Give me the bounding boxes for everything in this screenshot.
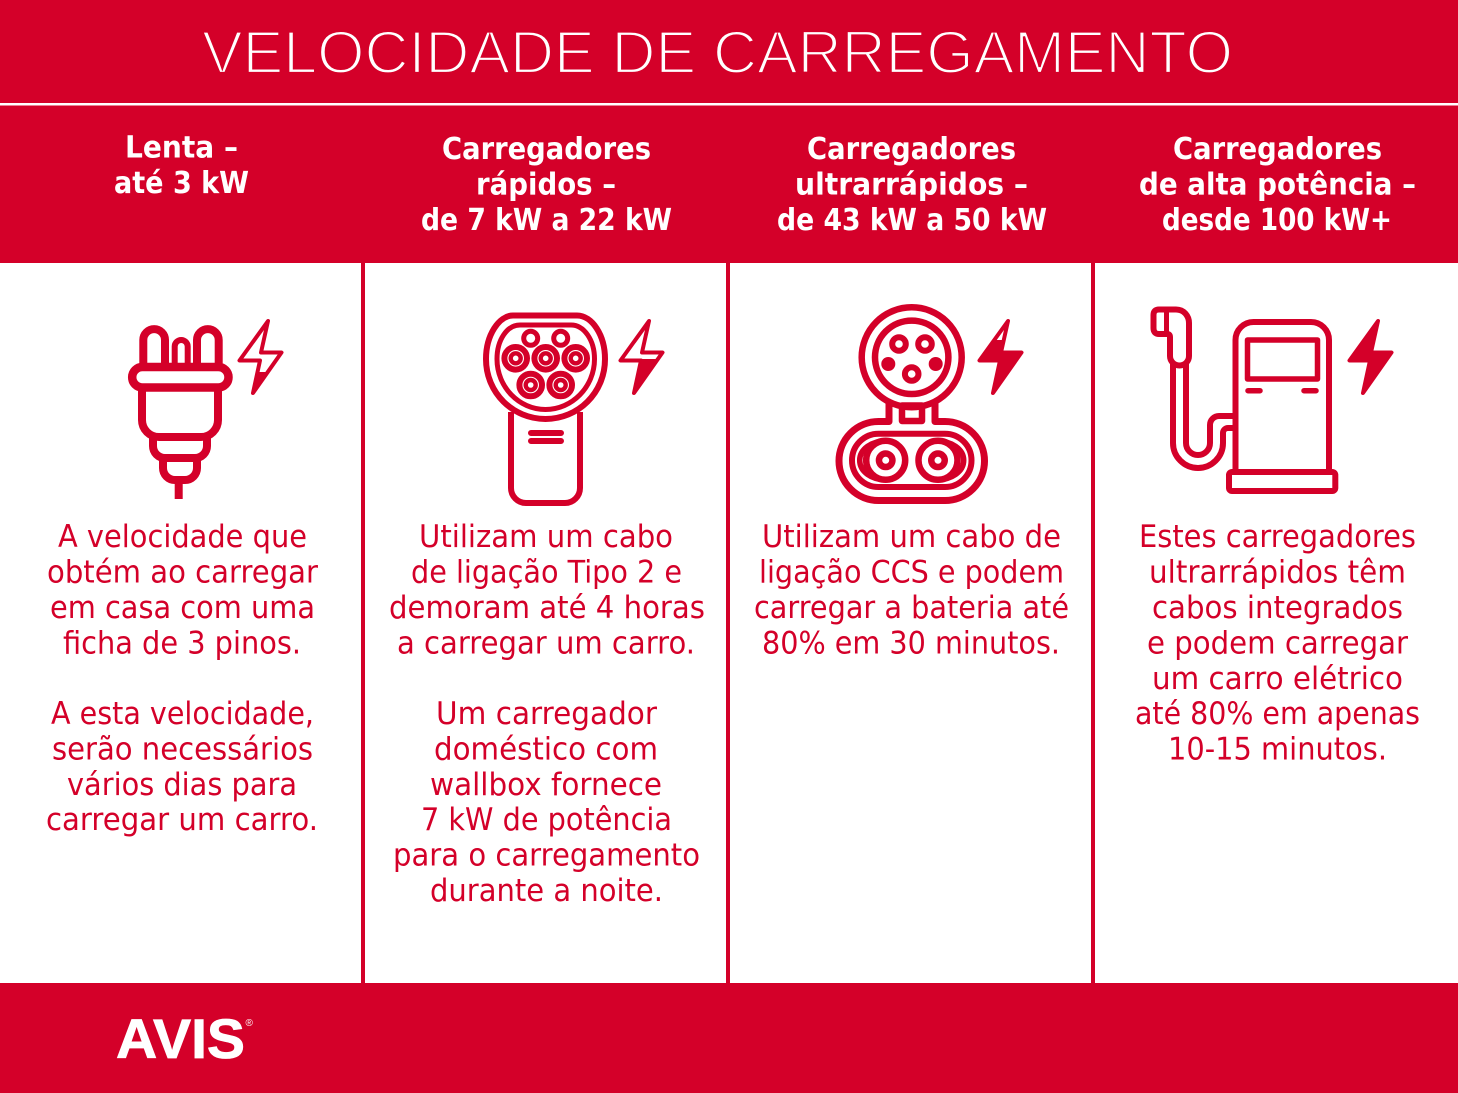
column 3 heading: Carregadores bbox=[807, 132, 1016, 167]
column 1 text: A esta velocidade, bbox=[51, 696, 314, 732]
column 2 text: a carregar um carro. bbox=[397, 625, 695, 661]
column 4 heading bbox=[1139, 132, 1416, 238]
column 2 text: demoram até 4 horas bbox=[389, 590, 705, 626]
title: VELOCIDADE DE CARREGAMENTO bbox=[202, 19, 1233, 86]
column 4 text: um carro elétrico bbox=[1152, 661, 1403, 697]
column 4 heading: Carregadores bbox=[1173, 132, 1382, 167]
column 2 text: wallbox fornece bbox=[430, 767, 662, 803]
column 2 heading: rápidos – bbox=[476, 168, 616, 202]
logo: AVIS: ® bbox=[246, 1018, 254, 1029]
column 3 text: Utilizam um cabo de bbox=[762, 519, 1061, 555]
column 3 heading bbox=[777, 132, 1047, 238]
icon: type 2 connector with half-filled bolt bbox=[486, 316, 662, 503]
icon: plug with outlined bolt bbox=[132, 321, 282, 499]
column 4 heading: de alta potência – bbox=[1139, 168, 1416, 202]
header band bbox=[0, 0, 1458, 263]
column 3 heading: de 43 kW a 50 kW bbox=[777, 203, 1047, 238]
column 4 text: até 80% em apenas bbox=[1135, 696, 1420, 732]
column 2 text: de ligação Tipo 2 e bbox=[411, 555, 682, 591]
column 1 heading bbox=[114, 130, 249, 201]
column 4 text bbox=[1135, 519, 1420, 767]
column 3 text: ligação CCS e podem bbox=[759, 555, 1064, 591]
column 1 text: ficha de 3 pinos. bbox=[63, 625, 301, 661]
column 1 text: vários dias para bbox=[67, 767, 297, 803]
column 2 text: Um carregador bbox=[436, 696, 657, 732]
column 2 text: doméstico com bbox=[434, 731, 658, 767]
column 2 text bbox=[389, 519, 705, 909]
icon: charging station with filled bolt bbox=[1154, 309, 1392, 491]
column 3 heading: ultrarrápidos – bbox=[795, 168, 1028, 202]
column 2 text: durante a noite. bbox=[430, 873, 663, 909]
icon: CCS connector with mostly filled bolt bbox=[839, 307, 1022, 500]
column 2 text: 7 kW de potência bbox=[421, 802, 672, 838]
column 1 text: carregar um carro. bbox=[46, 802, 318, 838]
column 4 text: Estes carregadores bbox=[1139, 519, 1416, 555]
column 4 text: e podem carregar bbox=[1147, 625, 1408, 661]
column 1 text: obtém ao carregar bbox=[47, 555, 318, 591]
column 4 text: ultrarrápidos têm bbox=[1149, 555, 1406, 591]
footer band bbox=[0, 983, 1458, 1093]
column 1 text: serão necessários bbox=[52, 731, 313, 767]
column 1 text bbox=[46, 519, 318, 838]
column 2 text: Utilizam um cabo bbox=[419, 519, 673, 555]
column 2 heading: Carregadores bbox=[442, 132, 651, 167]
column 3 text: carregar a bateria até bbox=[754, 590, 1069, 626]
column 1 heading: Lenta – bbox=[125, 130, 238, 166]
column 4 heading: desde 100 kW+ bbox=[1162, 203, 1392, 238]
column 2 heading bbox=[421, 132, 672, 238]
column 2 text: para o carregamento bbox=[393, 838, 700, 874]
logo: AVIS: AVIS bbox=[116, 1007, 245, 1070]
column 1 heading: até 3 kW bbox=[114, 166, 249, 201]
column 4 text: cabos integrados bbox=[1152, 590, 1403, 626]
column 2 heading: de 7 kW a 22 kW bbox=[421, 203, 672, 238]
column 1 text: A velocidade que bbox=[58, 519, 307, 555]
column 3 text bbox=[754, 519, 1069, 661]
column 3 text: 80% em 30 minutos. bbox=[762, 625, 1060, 661]
column 1 text: em casa com uma bbox=[50, 590, 315, 626]
column 4 text: 10-15 minutos. bbox=[1168, 731, 1387, 767]
